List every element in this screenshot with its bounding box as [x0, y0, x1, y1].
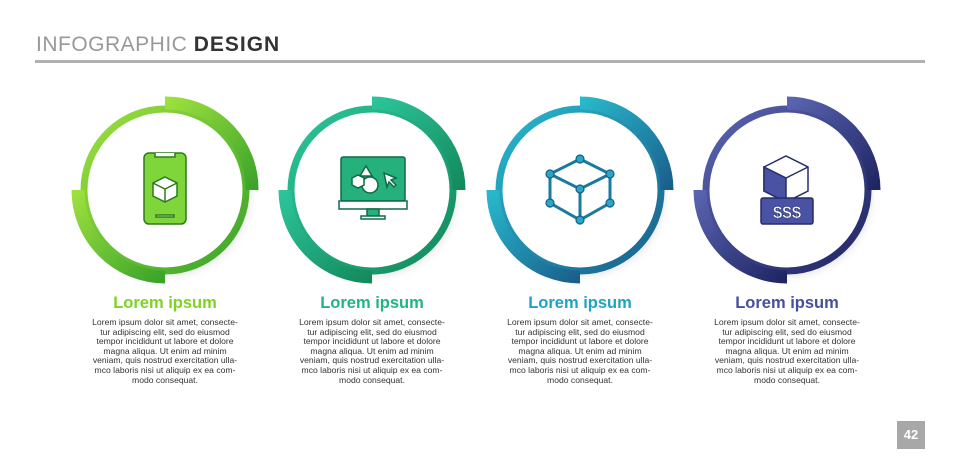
column 4 text: tempor incididunt ut labore et dolore	[718, 336, 856, 346]
column 4 text: magna aliqua. Ut enim ad minim	[725, 346, 849, 356]
column 4 text: Lorem ipsum dolor sit amet, consecte-	[714, 317, 860, 327]
column 2 text: tur adipiscing elit, sed do eiusmod	[307, 327, 437, 337]
circle 3	[493, 103, 667, 277]
column 3 text: mco laboris nisi ut aliquip ex ea com-	[510, 365, 650, 375]
column 3 text	[507, 294, 653, 385]
icon: monitor with shapes	[339, 157, 407, 219]
column 3 text: Lorem ipsum	[528, 294, 632, 312]
column 4 text: veniam, quis nostrud exercitation ulla-	[715, 355, 859, 365]
column 3 text: modo consequat.	[547, 375, 613, 385]
title: INFOGRAPHIC DESIGN	[36, 33, 280, 56]
column 1 text: Lorem ipsum	[113, 294, 217, 312]
column 2 text: Lorem ipsum	[320, 294, 424, 312]
column 4 text: tur adipiscing elit, sed do eiusmod	[722, 327, 852, 337]
column 4 text: Lorem ipsum	[735, 294, 839, 312]
column 2 text: veniam, quis nostrud exercitation ulla-	[300, 355, 444, 365]
column 3 text: veniam, quis nostrud exercitation ulla-	[508, 355, 652, 365]
column 2 text: tempor incididunt ut labore et dolore	[303, 336, 441, 346]
column 1 text: tempor incididunt ut labore et dolore	[96, 336, 234, 346]
circle 4	[700, 103, 874, 277]
column 1 text: veniam, quis nostrud exercitation ulla-	[93, 355, 237, 365]
page number	[897, 421, 925, 449]
column 2 text	[299, 294, 445, 385]
column 4 text: mco laboris nisi ut aliquip ex ea com-	[717, 365, 857, 375]
column 1 text: mco laboris nisi ut aliquip ex ea com-	[95, 365, 235, 375]
column 3 text: tempor incididunt ut labore et dolore	[511, 336, 649, 346]
column 4 text	[714, 294, 860, 385]
column 2 text: mco laboris nisi ut aliquip ex ea com-	[302, 365, 442, 375]
column 3 text: magna aliqua. Ut enim ad minim	[518, 346, 642, 356]
circle 2	[285, 103, 459, 277]
icon: cube with price	[761, 156, 813, 224]
column 2 text: magna aliqua. Ut enim ad minim	[310, 346, 434, 356]
column 1 text: tur adipiscing elit, sed do eiusmod	[100, 327, 230, 337]
icon: phone with cube	[144, 153, 186, 224]
column 3 text: tur adipiscing elit, sed do eiusmod	[515, 327, 645, 337]
column 3 text: Lorem ipsum dolor sit amet, consecte-	[507, 317, 653, 327]
column 2 text: Lorem ipsum dolor sit amet, consecte-	[299, 317, 445, 327]
icon: cube wireframe	[546, 155, 614, 224]
column 1 text: Lorem ipsum dolor sit amet, consecte-	[92, 317, 238, 327]
column 4 text: modo consequat.	[754, 375, 820, 385]
column 2 text: modo consequat.	[339, 375, 405, 385]
circle 1	[78, 103, 252, 277]
page number: 42	[904, 427, 918, 442]
column 1 text: modo consequat.	[132, 375, 198, 385]
column 1 text: magna aliqua. Ut enim ad minim	[103, 346, 227, 356]
column 1 text	[92, 294, 238, 385]
circle 4: $$$	[773, 203, 802, 222]
